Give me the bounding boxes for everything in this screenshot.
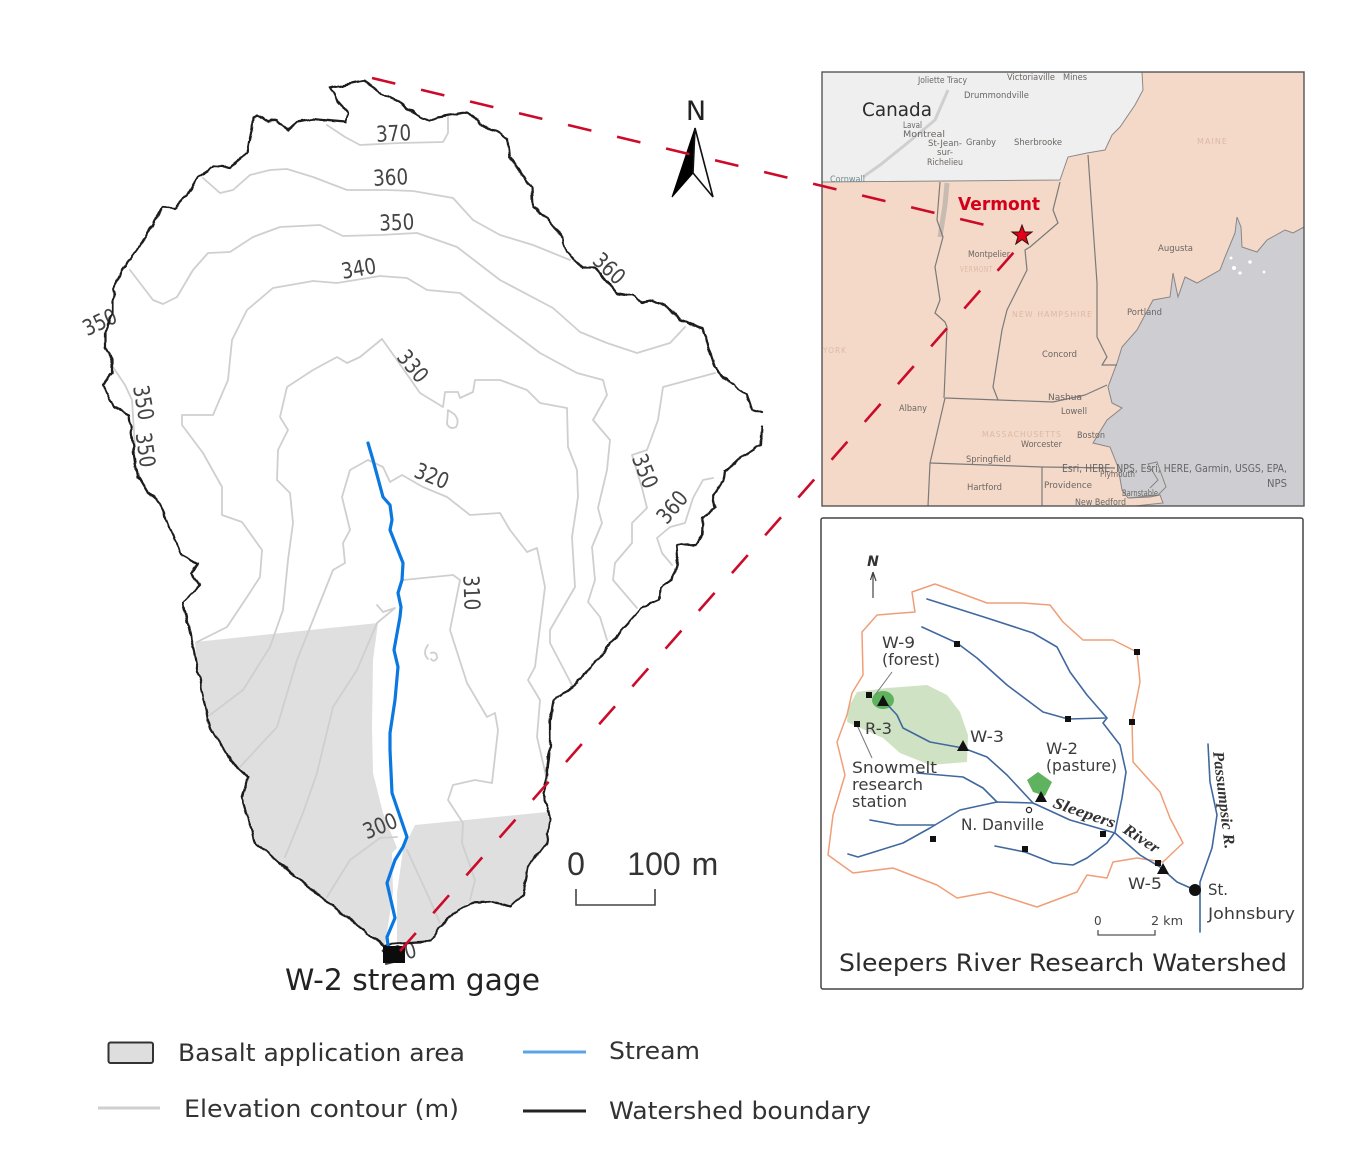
north arrow [672, 96, 713, 197]
legend: stream: Stream [609, 1037, 700, 1065]
site labels: (forest) [882, 650, 940, 669]
place names: Boston [1077, 431, 1105, 441]
place names: NEW HAMPSHIRE [1012, 310, 1093, 319]
place names: New Bedford [1075, 498, 1126, 508]
river names: River [1119, 820, 1163, 858]
panel: regional locator map [822, 72, 1304, 508]
small north arrow [867, 554, 879, 598]
place names: Albany [899, 404, 928, 414]
elevation labels: 350 [127, 383, 158, 422]
elevation labels: 290 [379, 938, 419, 971]
elevation labels [79, 121, 694, 971]
elevation labels: 350 [130, 431, 159, 469]
site labels: W-3 [970, 727, 1004, 746]
place names: Lowell [1061, 407, 1087, 417]
place names [822, 73, 1228, 508]
elevation labels: 350 [379, 210, 415, 237]
elevation labels: 360 [587, 248, 630, 290]
green catchments [872, 691, 1052, 796]
site labels: N. Danville [961, 815, 1044, 834]
legend: elevation contour: Elevation contour (m) [184, 1095, 459, 1123]
site labels: W-2 [1046, 739, 1078, 758]
place names: sur- [937, 148, 953, 158]
place names: Hartford [967, 483, 1002, 493]
elevation labels: 360 [652, 486, 694, 529]
watershed boundary [103, 81, 762, 945]
site labels: station [852, 792, 907, 811]
site labels: research [852, 775, 923, 794]
place names: Joliette Tracy [917, 76, 968, 86]
leader lines [857, 672, 892, 758]
map attribution [1062, 462, 1287, 490]
site labels: Snowmelt [852, 758, 937, 777]
elevation contours [113, 117, 715, 923]
place names: MASSACHUSETTS [982, 430, 1062, 439]
place names: Victoriaville [1007, 73, 1055, 83]
Vermont label: Vermont [958, 194, 1040, 215]
site labels: W-9 [882, 633, 915, 652]
station markers [854, 641, 1201, 896]
scale bar: m [692, 846, 718, 882]
site labels: (pasture) [1046, 756, 1117, 775]
place names: Drummondville [964, 91, 1029, 101]
icon: location star [1012, 225, 1032, 244]
place names: Portland [1127, 308, 1162, 318]
legend [98, 1037, 871, 1125]
elevation labels: 330 [391, 345, 433, 388]
river names: Passumpsic R. [1209, 749, 1238, 850]
elevation labels: 360 [373, 165, 409, 192]
place names: Granby [966, 138, 997, 148]
place names: St-Jean- [928, 139, 962, 149]
Canada label: Canada [862, 99, 932, 121]
km scale bar: 2 km [1151, 914, 1183, 928]
site labels: W-5 [1128, 874, 1162, 893]
place names: Augusta [1158, 244, 1193, 254]
panel caption: Sleepers River Research Watershed [839, 949, 1287, 977]
place names: Barnstable [1122, 489, 1158, 499]
stream [368, 443, 407, 945]
legend: basalt application area: Basalt application area [178, 1039, 465, 1067]
legend: watershed boundary: Watershed boundary [609, 1097, 871, 1125]
scale bar [567, 846, 718, 905]
elevation labels: 370 [376, 121, 412, 148]
place names: Richelieu [927, 158, 963, 168]
river names [1051, 749, 1238, 858]
W-2 stream gage marker [383, 946, 405, 963]
basalt application area shading [195, 623, 550, 945]
light green forest area [847, 685, 968, 765]
panel: Sleepers River Research Watershed [821, 518, 1303, 989]
elevation labels: 350 [79, 304, 121, 342]
place names: Mines [1063, 73, 1087, 83]
place names: Montpelier [968, 250, 1010, 260]
north arrow: N [686, 96, 706, 127]
map attribution: Esri, HERE, NPS, Esri, HERE, Garmin, USGS, EPA, [1062, 462, 1287, 475]
elevation labels: 310 [457, 575, 484, 611]
place names: Nashua [1048, 393, 1082, 403]
place names: Laval [903, 121, 922, 131]
km scale bar: 0 [1094, 914, 1102, 928]
red dashed extent lines [372, 78, 1014, 951]
place names: YORK [822, 346, 847, 355]
site labels [852, 633, 1295, 923]
river names: Sleepers [1051, 795, 1118, 832]
W-2 stream gage label: W-2 stream gage [285, 963, 540, 997]
place names: VERMONT [960, 265, 993, 274]
scale bar: 0 [567, 846, 585, 882]
site labels: Johnsbury [1207, 904, 1295, 923]
place names: Sherbrooke [1014, 138, 1062, 148]
place names: Montreal [903, 130, 945, 140]
elevation labels: 300 [360, 809, 401, 845]
elevation labels: 350 [626, 451, 662, 492]
map background and regions [822, 72, 1304, 506]
place names: Cornwall [830, 175, 865, 185]
place names: Worcester [1021, 440, 1062, 450]
place names: Concord [1042, 350, 1077, 360]
rivers [848, 599, 1217, 932]
place names: Plymouth [1100, 470, 1135, 480]
km scale bar [1094, 914, 1183, 935]
panel: main watershed map [79, 81, 762, 997]
map attribution: NPS [1267, 477, 1287, 490]
watershed outline [828, 584, 1183, 907]
place names: Springfield [966, 455, 1011, 465]
place names: MAINE [1197, 137, 1228, 146]
site labels: St. [1208, 880, 1228, 899]
elevation labels: 320 [411, 459, 452, 495]
place names: Providence [1044, 481, 1092, 491]
scale bar: 100 [627, 846, 681, 882]
elevation labels: 340 [339, 254, 378, 285]
North Danville marker [1026, 807, 1032, 813]
small north arrow: N [867, 554, 879, 570]
site labels: R-3 [865, 719, 892, 738]
